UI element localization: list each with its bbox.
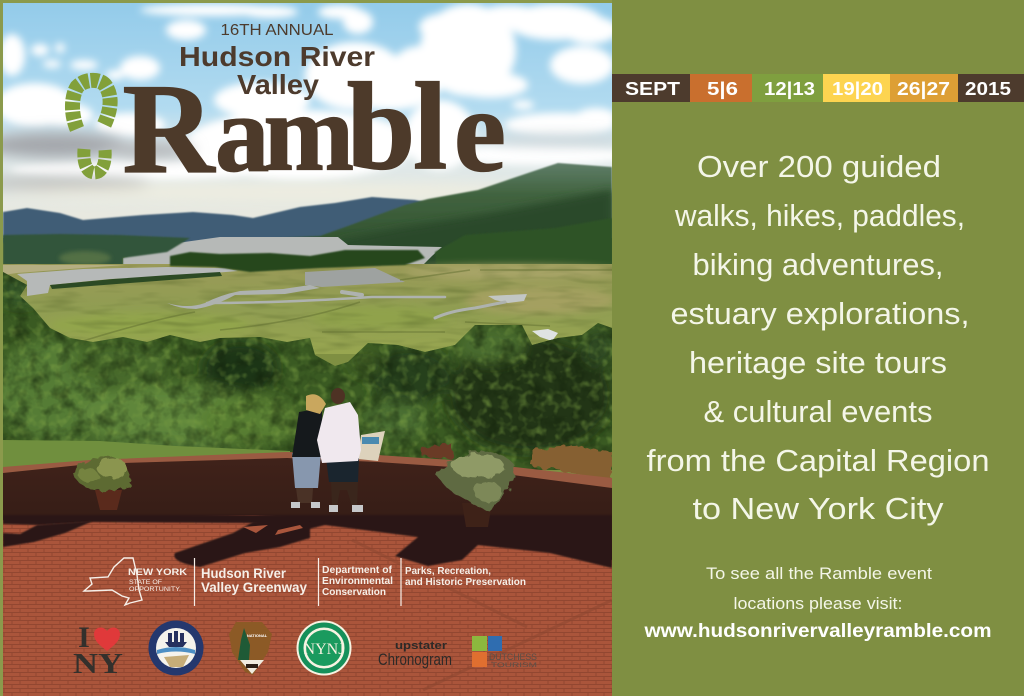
- main description: to New York City: [692, 491, 944, 526]
- main description: walks, hikes, paddles,: [674, 198, 965, 233]
- far mountains: [3, 197, 440, 243]
- Parks, Recreation, and Historic Preservation: [405, 566, 526, 588]
- logo: National Park Service arrowhead: [229, 622, 272, 675]
- logo: National Park Service arrowhead: NATIONAL: [247, 633, 268, 638]
- Department of Environmental Conservation: Conservation: [322, 586, 386, 598]
- lawn: [3, 440, 290, 467]
- website prompt: To see all the Ramble event: [706, 564, 932, 583]
- annual line: 16TH ANNUAL: [220, 22, 334, 39]
- website prompt: locations please visit:: [734, 594, 902, 613]
- heading: Valley: Valley: [237, 69, 319, 100]
- logo: Dutchess Tourism: TOURISM: [491, 663, 537, 669]
- wall coping: [3, 452, 612, 488]
- narrow island strip: [50, 272, 222, 289]
- Parks, Recreation, and Historic Preservation: and Historic Preservation: [405, 577, 526, 588]
- New York State of Opportunity: NEW YORK: [128, 567, 187, 578]
- island highlights: [59, 251, 111, 265]
- wide river: [123, 237, 442, 264]
- date band: 5|6: [707, 79, 738, 99]
- logo: I love NY: I: [78, 621, 90, 654]
- main description: Over 200 guided: [697, 149, 941, 184]
- shadow under the wall: [3, 515, 612, 568]
- main description: biking adventures,: [692, 247, 944, 282]
- dividers: [194, 558, 401, 606]
- icon: boot heel: [84, 149, 105, 173]
- New York State of Opportunity: STATE OF: [129, 579, 162, 586]
- New York State of Opportunity: OPPORTUNITY.: [129, 586, 181, 593]
- logo: Hudson River Valley National Heritage Area seal: [148, 620, 204, 676]
- brick glints: [243, 525, 303, 535]
- panel: landscape photograph: [0, 3, 630, 696]
- main description: from the Capital Region: [646, 443, 990, 478]
- left wooded island: [3, 234, 190, 265]
- heading: Ramble: l: [413, 58, 447, 196]
- heading: Ramble: m: [264, 71, 354, 194]
- icon: boot sole: [72, 80, 110, 129]
- Hudson River Valley Greenway: [201, 566, 307, 595]
- date band: 19|20: [832, 79, 883, 99]
- left planter: [72, 455, 131, 510]
- floor shadows: [3, 515, 612, 568]
- logo: Dutchess Tourism: DUTCHESS: [489, 652, 537, 663]
- logo: Upstater Chronogram: Chronogram: [378, 650, 452, 669]
- tan marsh patches: [413, 260, 612, 314]
- title block: [122, 22, 506, 200]
- photo border: [2, 2, 612, 696]
- icon: New York state outline: [84, 558, 142, 605]
- marsh water: [17, 267, 558, 341]
- date band: SEPT: [625, 79, 680, 99]
- main description: [646, 149, 990, 526]
- logo: New York New Jersey Trail Conference: [296, 620, 352, 676]
- main description: & cultural events: [704, 394, 932, 429]
- heading: Hudson River: Hudson River: [179, 41, 375, 72]
- logo: Upstater Chronogram: [378, 640, 452, 669]
- man: [317, 388, 363, 512]
- heading: Ramble: e: [454, 65, 506, 196]
- heading: Ramble: R: [122, 57, 216, 200]
- diagonal pavement seam: [352, 540, 612, 690]
- heading: Ramble: b: [347, 58, 415, 196]
- main description: estuary explorations,: [670, 296, 970, 331]
- right planter: [435, 450, 515, 527]
- terrace wall: [3, 457, 612, 560]
- clouds: [0, 4, 630, 198]
- website prompt: [706, 564, 932, 613]
- hill shadow band: [346, 186, 612, 246]
- logo: I love NY: [73, 621, 123, 680]
- sand bar: [3, 265, 125, 275]
- date band: 2015: [965, 79, 1011, 99]
- logo: Upstater Chronogram: upstater: [395, 640, 448, 652]
- red flower bed: [422, 444, 612, 482]
- marsh: [3, 264, 612, 354]
- icon: boot print: [72, 80, 110, 173]
- New York State of Opportunity: [128, 567, 187, 593]
- marsh texture: [3, 264, 612, 354]
- date band: [612, 74, 1024, 102]
- logo: New York New Jersey Trail Conference: NYNJ: [304, 641, 344, 658]
- Hudson River Valley Greenway: Hudson River: [201, 566, 287, 581]
- left tree shadow: [3, 521, 93, 547]
- Parks, Recreation, and Historic Preservation: Parks, Recreation,: [405, 566, 491, 577]
- central figure shadow: [174, 522, 310, 567]
- date band: 26|27: [897, 79, 950, 99]
- Department of Environmental Conservation: [322, 564, 393, 598]
- interpretive sign: [358, 431, 385, 461]
- date band: 12|13: [764, 79, 815, 99]
- right forested hill: [288, 162, 612, 264]
- Department of Environmental Conservation: Department of: [322, 564, 392, 576]
- Hudson River Valley Greenway: Valley Greenway: [201, 580, 307, 595]
- logo: I love NY: NY: [73, 648, 123, 680]
- right shore forest: [435, 218, 612, 266]
- tree belt: [0, 270, 614, 470]
- icon: heart: [94, 627, 120, 651]
- panel: event information: [612, 74, 1024, 642]
- sponsor logos: agencies: [84, 558, 526, 606]
- marsh ditches: [70, 270, 612, 345]
- couple looking at sign: [291, 388, 363, 512]
- main description: heritage site tours: [689, 345, 947, 380]
- heading: Ramble: a: [215, 72, 269, 194]
- sky: [3, 3, 612, 238]
- pavement: [3, 505, 612, 696]
- logo: Dutchess Tourism: [472, 636, 537, 669]
- Department of Environmental Conservation: Environmental: [322, 575, 393, 587]
- tree line across river: [170, 250, 425, 272]
- website address: www.hudsonrivervalleyramble.com: [643, 621, 992, 642]
- woman: [291, 394, 326, 508]
